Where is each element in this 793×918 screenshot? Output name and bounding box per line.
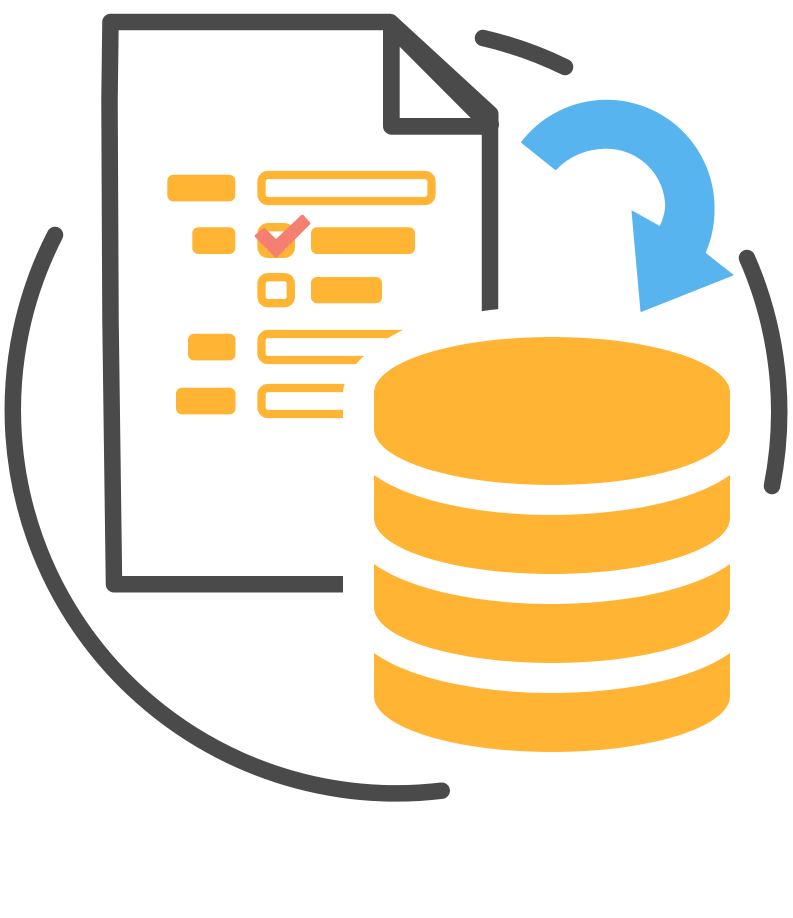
circular arc: right segment (747, 258, 779, 486)
form rows (167, 175, 432, 414)
database cylinder (374, 337, 730, 752)
database second layer (374, 475, 730, 574)
red check mark (257, 217, 308, 256)
circular arc: top segment (483, 38, 565, 67)
form label pills (167, 175, 415, 414)
document outline (110, 22, 490, 584)
database top disk (374, 337, 730, 485)
database bottom layer (374, 653, 730, 752)
form input boxes (262, 175, 432, 414)
document folded corner (383, 14, 499, 135)
circular arc: left large segment (13, 235, 442, 793)
database third layer (374, 564, 730, 663)
white mask behind database (343, 306, 761, 600)
blue curved arrow (522, 100, 733, 312)
